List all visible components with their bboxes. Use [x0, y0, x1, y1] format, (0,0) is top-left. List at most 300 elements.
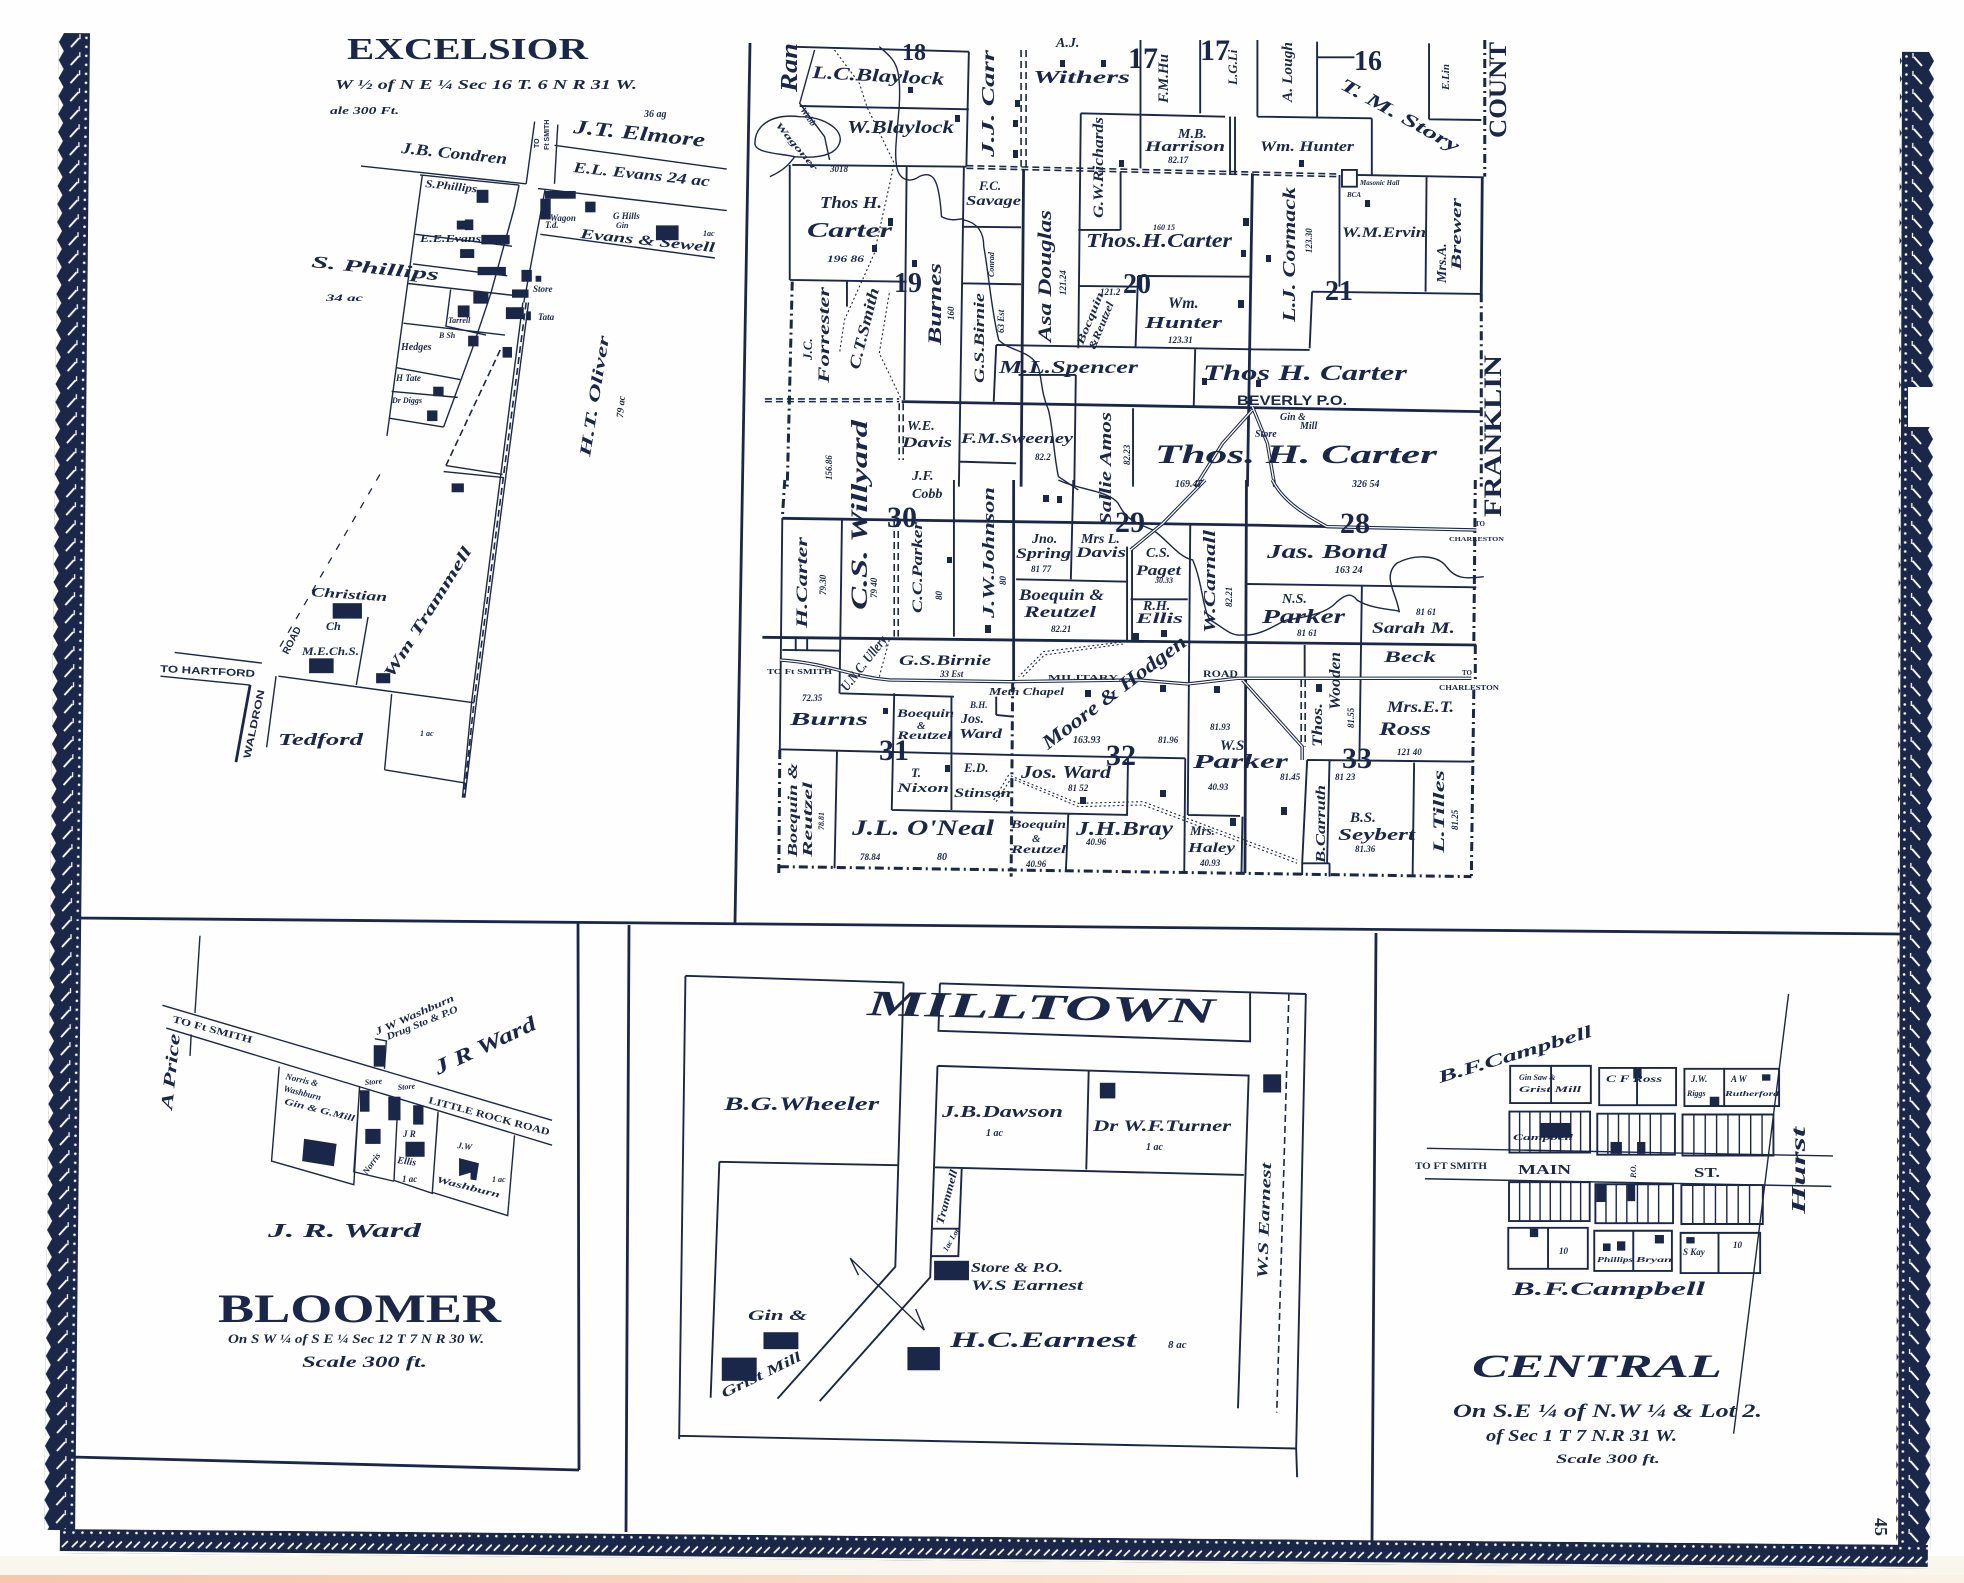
ornamental border: bottom [60, 1529, 1928, 1569]
owner names north half: Gin & [1280, 412, 1306, 423]
owner names north half: &Reutzel [1087, 299, 1117, 351]
road labels: TO Ft SMITH [171, 1014, 254, 1046]
owner names: J R [402, 1129, 416, 1139]
buildings [309, 190, 679, 683]
county labels: COUNT [1485, 42, 1512, 138]
owner names: Gin & [748, 1308, 807, 1324]
owner names north half: Bocquin [1074, 291, 1106, 347]
owner names south half: Ellis [1134, 611, 1183, 627]
owner names south half: Jno. [1031, 532, 1057, 547]
owner names north half: Wm. [1168, 295, 1199, 312]
owner names north half: 82.17 [1168, 155, 1189, 165]
owner names south half: Ross [1378, 719, 1431, 740]
roads and lots [162, 936, 552, 1216]
owner names south half: Boequin [1010, 817, 1066, 831]
owner names and road labels: ROAD [281, 625, 304, 656]
owner names south half: Burns [788, 709, 868, 729]
owner names south half: C.S. [1146, 546, 1170, 561]
owner names north half: L.C.Blaylock [810, 62, 945, 89]
owner names and road labels: Ch [326, 619, 341, 633]
owner names south half: 72.35 [802, 693, 823, 703]
owner names and road labels: S. Phillips [311, 252, 441, 284]
owner names: Dr W.F.Turner [1092, 1118, 1232, 1135]
owner names north half: 160 [946, 306, 956, 320]
owner names south half: N.S. [1281, 592, 1307, 607]
house markers [872, 60, 1370, 826]
owner names: Store [397, 1081, 416, 1092]
owner names and road labels: Wm Trammell [381, 543, 476, 681]
owner names north half: Thos H. Carter [1203, 360, 1408, 385]
owner names [1434, 1022, 1810, 1466]
owner names: Scale 300 ft. [302, 1354, 427, 1371]
owner names south half: Sarah M. [1372, 620, 1455, 637]
owner names north half: Wagoner [773, 120, 820, 173]
owner names: On S.E ¼ of N.W ¼ & Lot 2. [1453, 1401, 1762, 1422]
owner names south half: 163 24 [1335, 565, 1362, 576]
owner names: A Price [157, 1032, 184, 1112]
owner names north half: W.M.Ervin [1342, 225, 1426, 241]
county labels: FRANKLIN [1480, 355, 1507, 517]
owner names north half: BCA [1346, 191, 1361, 199]
owner names north half: Sallie Amos [1096, 411, 1115, 525]
owner names south half: 80 [937, 852, 947, 863]
owner names north half: 63 Est [996, 309, 1006, 333]
owner names and road labels: Tedford [278, 730, 364, 749]
street labels: MAIN [1518, 1163, 1571, 1178]
owner names north half: Thos H. [820, 193, 882, 212]
owner names south half: Mrs. [1189, 823, 1215, 838]
owner names and road labels: 1 ac [420, 729, 434, 738]
owner names south half: 40.96 [1025, 859, 1047, 869]
owner names and road labels: S.Phillips [425, 178, 478, 195]
owner names: Rutherford [1723, 1090, 1780, 1098]
owner names: Drug Sto & P.O [384, 1004, 460, 1043]
owner names south half: T. [911, 765, 921, 780]
road labels: CHARLESTON [1439, 684, 1499, 692]
owner names south half: 81.96 [1158, 735, 1179, 745]
owner names south half: Mrs.E.T. [1386, 699, 1454, 716]
owner names south half: Parker [1261, 606, 1345, 628]
owner names: 8 ac [1168, 1339, 1187, 1351]
owner names north half: Harrison [1144, 139, 1225, 155]
panel: Bloomer town plat [157, 936, 552, 1371]
owner names and road labels: 34 ac [324, 293, 363, 303]
owner names: W.S Earnest [1255, 1161, 1275, 1279]
section numbers: 32 [1106, 739, 1136, 772]
street labels [1415, 1161, 1720, 1181]
owner names south half: & [1032, 833, 1041, 845]
owner names north half: Webb [798, 105, 819, 128]
owner names south half: Davis [1075, 545, 1126, 561]
road labels: CHARLESTON [1449, 537, 1505, 543]
owner names north half: 156.86 [824, 455, 834, 480]
county labels [777, 42, 1512, 517]
owner names north half: Wm. Hunter [1260, 139, 1354, 155]
owner names: C F Ross [1606, 1074, 1663, 1084]
owner names and road labels: J.B. Condren [399, 140, 508, 168]
owner names south half: 81.25 [1450, 809, 1460, 830]
owner names south half: B.Carruth [1314, 785, 1329, 864]
owner names south half: Wooden [1327, 652, 1344, 710]
owner names south half: J.L. O'Neal [851, 815, 995, 840]
owner names north half: J.J. Carr [978, 48, 998, 159]
owner names south half: Thos. [1310, 703, 1326, 747]
owner names and road labels: Ft SMITH [544, 120, 551, 150]
county labels: Ran [777, 43, 803, 93]
owner names south half: J.W.Johnson [979, 487, 998, 619]
owner names south half: Stinson [954, 785, 1011, 800]
owner names and road labels [160, 109, 716, 760]
owner names north half: Davis [901, 435, 952, 451]
owner names: 1 ac [402, 1174, 417, 1184]
owner names and road labels: E.E.Evans [419, 234, 481, 245]
road labels: ROAD [1203, 669, 1239, 679]
owner names south half: 81 61 [1297, 628, 1317, 638]
panel: Central plat [1415, 994, 1833, 1466]
owner names south half: 80 [998, 576, 1008, 585]
owner names and road labels: Gin [616, 221, 629, 230]
owner names and road labels: Tarrell [448, 316, 471, 325]
owner names and road labels: 36 ag [643, 109, 666, 120]
streets and lots [1425, 994, 1833, 1434]
owner names: Store [364, 1076, 383, 1087]
owner names south half: W.S. [1220, 738, 1248, 754]
owner names north half: A. Lough [1280, 42, 1296, 103]
owner names south half: Seybert [1338, 825, 1417, 844]
owner names: Washburn [283, 1083, 322, 1102]
section numbers: 31 [879, 734, 909, 767]
owner names south half: 78.81 [817, 812, 826, 830]
owner names north half: G.W.Richards [1091, 117, 1107, 218]
buildings [722, 1074, 1281, 1381]
owner names north half: 160 15 [1153, 223, 1175, 232]
owner names south half: B.S. [1349, 810, 1376, 826]
owner names south half: B.H. [969, 700, 988, 710]
ornamental border: left [44, 33, 90, 1530]
owner names: Norris & [284, 1071, 319, 1088]
owner names and road labels: G Hills [613, 211, 640, 221]
owner names north half: W.E. [907, 419, 935, 434]
owner names north half: 123.30 [1304, 228, 1314, 253]
owner names and road labels: Store [533, 284, 553, 294]
owner names: Riggs [1686, 1089, 1706, 1098]
owner names: A W [1730, 1074, 1748, 1084]
panel: Milltown plat [679, 976, 1306, 1477]
owner names north half: T. M. Story [1337, 74, 1465, 157]
owner names south half: 81 61 [1416, 607, 1436, 617]
bottom paper edge [0, 1575, 1964, 1583]
panel: township map with sections 16-33 [755, 34, 1512, 878]
owner names: On S W ¼ of S E ¼ Sec 12 T 7 N R 30 W. [228, 1331, 484, 1346]
owner names: Grist Mill [1519, 1085, 1582, 1094]
owner names [157, 993, 540, 1371]
subtitle: location [330, 78, 637, 117]
owner names: B.G.Wheeler [722, 1094, 880, 1115]
owner names: Ellis [396, 1155, 417, 1169]
road labels [171, 1014, 551, 1138]
owner names north half: E.Lin [1440, 64, 1452, 91]
owner names south half: Boequin & [786, 763, 801, 858]
owner names north half: Burnes [925, 263, 946, 346]
owner names south half: J.H.Bray [1075, 818, 1173, 840]
owner names: J R Ward [429, 1011, 540, 1080]
owner names south half: Reutzel [801, 782, 816, 859]
owner names and road labels: 1ac [703, 229, 715, 238]
owner names north half: 196 86 [827, 254, 865, 264]
owner names and road labels: Hedges [400, 342, 432, 353]
owner names north half: Store [1255, 429, 1277, 440]
owner names south half: Beck [1382, 649, 1436, 666]
owner names north half: Hunter [1143, 313, 1223, 332]
owner names north half: L.G.Li [1225, 49, 1240, 86]
owner names north half: Savage [966, 194, 1021, 209]
subtitle: location: W ½ of N E ¼ Sec 16 T. 6 N R 31 W. [335, 78, 637, 93]
owner names and road labels: Evans & Sewell [578, 227, 716, 256]
owner names and road labels: H Tate [395, 373, 421, 383]
owner names south half: 30.33 [1154, 576, 1173, 585]
owner names north half: F.M.Hu [1156, 54, 1172, 104]
owner names north half: J.C. [800, 338, 815, 361]
section numbers: 30 [887, 501, 917, 534]
owner names and road labels: WALDRON [242, 689, 267, 760]
section numbers: 17 [1128, 42, 1158, 75]
buildings [302, 1045, 479, 1180]
section numbers: 20 [1123, 269, 1151, 300]
owner names south half: 163.93 [1073, 735, 1100, 746]
owner names: Campbell [1513, 1133, 1574, 1142]
owner names south half: C.C.Parker [910, 522, 926, 613]
owner names south half: Jas. Bond [1266, 541, 1388, 563]
owner names: B.F.Campbell [1434, 1022, 1595, 1087]
heading: Milltown: MILLTOWN [865, 983, 1219, 1031]
owner names north half: W.Blaylock [847, 117, 954, 137]
owner names and road labels: Dr Diggs [391, 396, 422, 405]
road labels: TO Ft SMITH [767, 668, 833, 676]
section numbers: 16 [1354, 46, 1382, 77]
owner names [719, 1094, 1275, 1402]
owner names: Grist Mill [719, 1350, 804, 1402]
owner names south half: 78.84 [860, 852, 881, 862]
owner names: Phillips [1597, 1256, 1633, 1264]
owner names south half: Mrs L. [1080, 532, 1120, 547]
owner names north half: J.F. [911, 469, 934, 484]
owner names: Trammell [934, 1167, 961, 1226]
owner names north half [773, 36, 1465, 610]
owner names: Scale 300 ft. [1556, 1451, 1660, 1466]
owner names north half: A.J. [1055, 36, 1079, 51]
owner names and road labels: H.T. Oliver [577, 333, 613, 459]
street labels: TO FT SMITH [1415, 1161, 1487, 1171]
owner names north half: Withers [1033, 67, 1130, 87]
panel: Excelsior town plat [160, 31, 727, 798]
owner names and road labels: J.T. Elmore [571, 116, 706, 152]
owner names south half: Nixon [895, 780, 949, 795]
road labels [767, 520, 1505, 692]
owner names south half: Haley [1187, 841, 1236, 856]
owner names south half: & [917, 720, 926, 732]
owner names north half: 3018 [829, 164, 848, 174]
streets and lots [679, 976, 1306, 1477]
owner names north half: G.S.Birnie [972, 293, 988, 383]
owner names south half: Ward [959, 727, 1003, 742]
road labels: TO [1462, 669, 1473, 677]
owner names north half: C.T.Smith [846, 286, 883, 371]
owner names south half: Reutzel [896, 728, 953, 742]
section numbers: 33 [1342, 742, 1372, 775]
owner names south half: Jos. Ward [1020, 762, 1112, 782]
owner names south half: 82.21 [1051, 624, 1071, 634]
owner names south half: Boequin [896, 706, 954, 720]
subtitle: location: ale 300 Ft. [330, 105, 399, 117]
owner names and road labels: Tata [538, 312, 555, 322]
owner names north half: Conrad [987, 251, 996, 277]
owner names north half: Masonic Hall [1359, 179, 1400, 187]
arrow: road crossing mark [850, 1258, 924, 1330]
street labels: ST. [1694, 1166, 1720, 1181]
owner names and road labels: TO [534, 138, 541, 148]
section numbers: 21 [1325, 276, 1353, 307]
owner names south half: 81 52 [1068, 783, 1089, 793]
section numbers: 18 [902, 40, 926, 66]
heading: Excelsior: EXCELSIOR [347, 31, 589, 66]
owner names north half: 121.24 [1058, 270, 1068, 295]
owner names: Gin & G.Mill [284, 1096, 356, 1124]
owner names south half: 81.36 [1355, 844, 1376, 854]
owner names south half: Jos. [960, 712, 984, 727]
road labels: LITTLE ROCK ROAD [427, 1095, 551, 1138]
owner names south half: H.Carter [794, 536, 811, 630]
owner names north half: F.M.Sweeney [960, 431, 1073, 447]
owner names south half: 81 23 [1335, 772, 1356, 782]
owner names north half: M.L.Spencer [998, 357, 1139, 377]
owner names south half: Reutzel [1023, 604, 1097, 621]
section numbers: 17 [1200, 34, 1230, 67]
owner names north half: 121.2 [1100, 287, 1121, 297]
owner names and road labels: B Sh [438, 331, 456, 340]
owner names north half: Mrs.A. [1435, 243, 1450, 284]
ornamental border: right [1896, 52, 1934, 1550]
owner names south half: R.H. [1142, 599, 1170, 614]
owner names and road labels: Christian [311, 584, 388, 604]
owner names south half: Spring [1016, 546, 1072, 562]
owner names south half: G.S.Birnie [899, 653, 991, 669]
owner names: 1 ac [1146, 1142, 1164, 1153]
road labels: TO [1475, 520, 1486, 528]
owner names south half: Meth Chapel [988, 687, 1064, 698]
owner names north half: F.C. [978, 178, 1001, 193]
owner names south half: 40.93 [1199, 858, 1221, 868]
owner names: W.S Earnest [971, 1278, 1084, 1294]
owner names north half: L.J. Cormack [1279, 187, 1299, 323]
owner names and road labels: M.E.Ch.S. [301, 644, 359, 658]
owner names north half: 326 54 [1351, 479, 1380, 490]
heading: Bloomer: BLOOMER [218, 1286, 503, 1331]
owner names south half [786, 487, 1460, 869]
owner names north half: Thos.H.Carter [1086, 230, 1232, 252]
owner names south half: 79 40 [869, 577, 879, 598]
owner names: 10 [1559, 1246, 1568, 1256]
owner names south half: E.D. [963, 760, 989, 775]
owner names north half: Asa Douglas [1035, 210, 1056, 343]
section lines north half [755, 40, 1485, 490]
owner names: P.O. [1629, 1164, 1638, 1178]
owner names south half: Reutzel [1010, 842, 1067, 856]
owner names: B.F.Campbell [1510, 1279, 1706, 1300]
owner names south half: 33 Est [939, 669, 964, 679]
owner names: Hurst [1788, 1124, 1810, 1216]
owner names: 1ac Lot [941, 1226, 961, 1253]
owner names south half: U.N.C. Ullery [838, 633, 891, 694]
section numbers: 28 [1340, 507, 1370, 540]
owner names south half: 81.55 [1346, 707, 1356, 728]
owner names and road labels: T.d. [545, 220, 559, 230]
owner names north half: Carter [807, 218, 893, 242]
owner names: Bryan [1634, 1256, 1672, 1264]
owner names north half: Mill [1299, 421, 1317, 432]
page number: 45 [1871, 1518, 1891, 1536]
owner names south half: 79.30 [818, 574, 828, 595]
Beverly post office label: BEVERLY P.O. [1237, 392, 1347, 408]
owner names: J.W [456, 1140, 474, 1152]
owner names: 1 ac [492, 1175, 506, 1184]
owner names south half: 40.96 [1085, 837, 1107, 847]
road labels: MILITARY [1048, 674, 1118, 682]
owner names: J W Washburn [372, 993, 456, 1038]
owner names south half: 81.93 [1210, 722, 1231, 732]
ornamental border: notch in right edge [1908, 387, 1938, 427]
section numbers: 19 [894, 268, 922, 299]
owner names and road labels: 79 ac [615, 395, 628, 418]
owner names: 1 ac [986, 1128, 1004, 1139]
owner names: J.B.Dawson [941, 1102, 1063, 1121]
owner names and road labels: Wagon [550, 213, 576, 223]
owner names south half: 121 40 [1397, 747, 1422, 757]
owner names north half: 169.47 [1175, 479, 1204, 490]
buildings [1530, 1068, 1770, 1251]
owner names south half: 81 77 [1031, 564, 1052, 574]
owner names north half: 82.23 [1122, 444, 1132, 465]
owner names south half: Cobb [912, 487, 942, 502]
owner names: of Sec 1 T 7 N.R 31 W. [1486, 1426, 1677, 1445]
section lines south half [762, 480, 1484, 878]
owner names: J.W. [1690, 1074, 1707, 1084]
owner names south half: 82.21 [1224, 587, 1234, 607]
owner names north half: Forrester [816, 286, 833, 385]
owner names south half: Parker [1191, 751, 1288, 773]
owner names north half: C.S. Willyard [847, 419, 872, 610]
roads and lot lines [160, 122, 727, 798]
heading: Central: CENTRAL [1472, 1349, 1722, 1385]
owner names south half: Moore & Hodgen [1037, 631, 1191, 755]
owner names south half: L.Tilles [1431, 770, 1448, 855]
owner names: Gin Saw & [1519, 1073, 1556, 1082]
owner names: Norris [360, 1150, 383, 1177]
owner names south half: 81.45 [1280, 772, 1301, 782]
owner names south half: Boequin & [1018, 587, 1105, 604]
owner names: H.C.Earnest [948, 1327, 1137, 1352]
owner names south half: Paget [1136, 563, 1182, 579]
section numbers: 29 [1115, 506, 1145, 539]
owner names north half: 82.2 [1035, 452, 1051, 462]
owner names: 10 [1733, 1240, 1742, 1250]
owner names and road labels: TO HARTFORD [160, 664, 255, 680]
owner names and road labels: E.L. Evans 24 ac [571, 160, 711, 190]
owner names north half: 123.31 [1168, 335, 1193, 345]
owner names: Washburn [436, 1174, 501, 1200]
owner names south half: 80 [934, 590, 944, 600]
owner names: S Kay [1683, 1247, 1706, 1257]
owner names: Store & P.O. [971, 1261, 1063, 1276]
